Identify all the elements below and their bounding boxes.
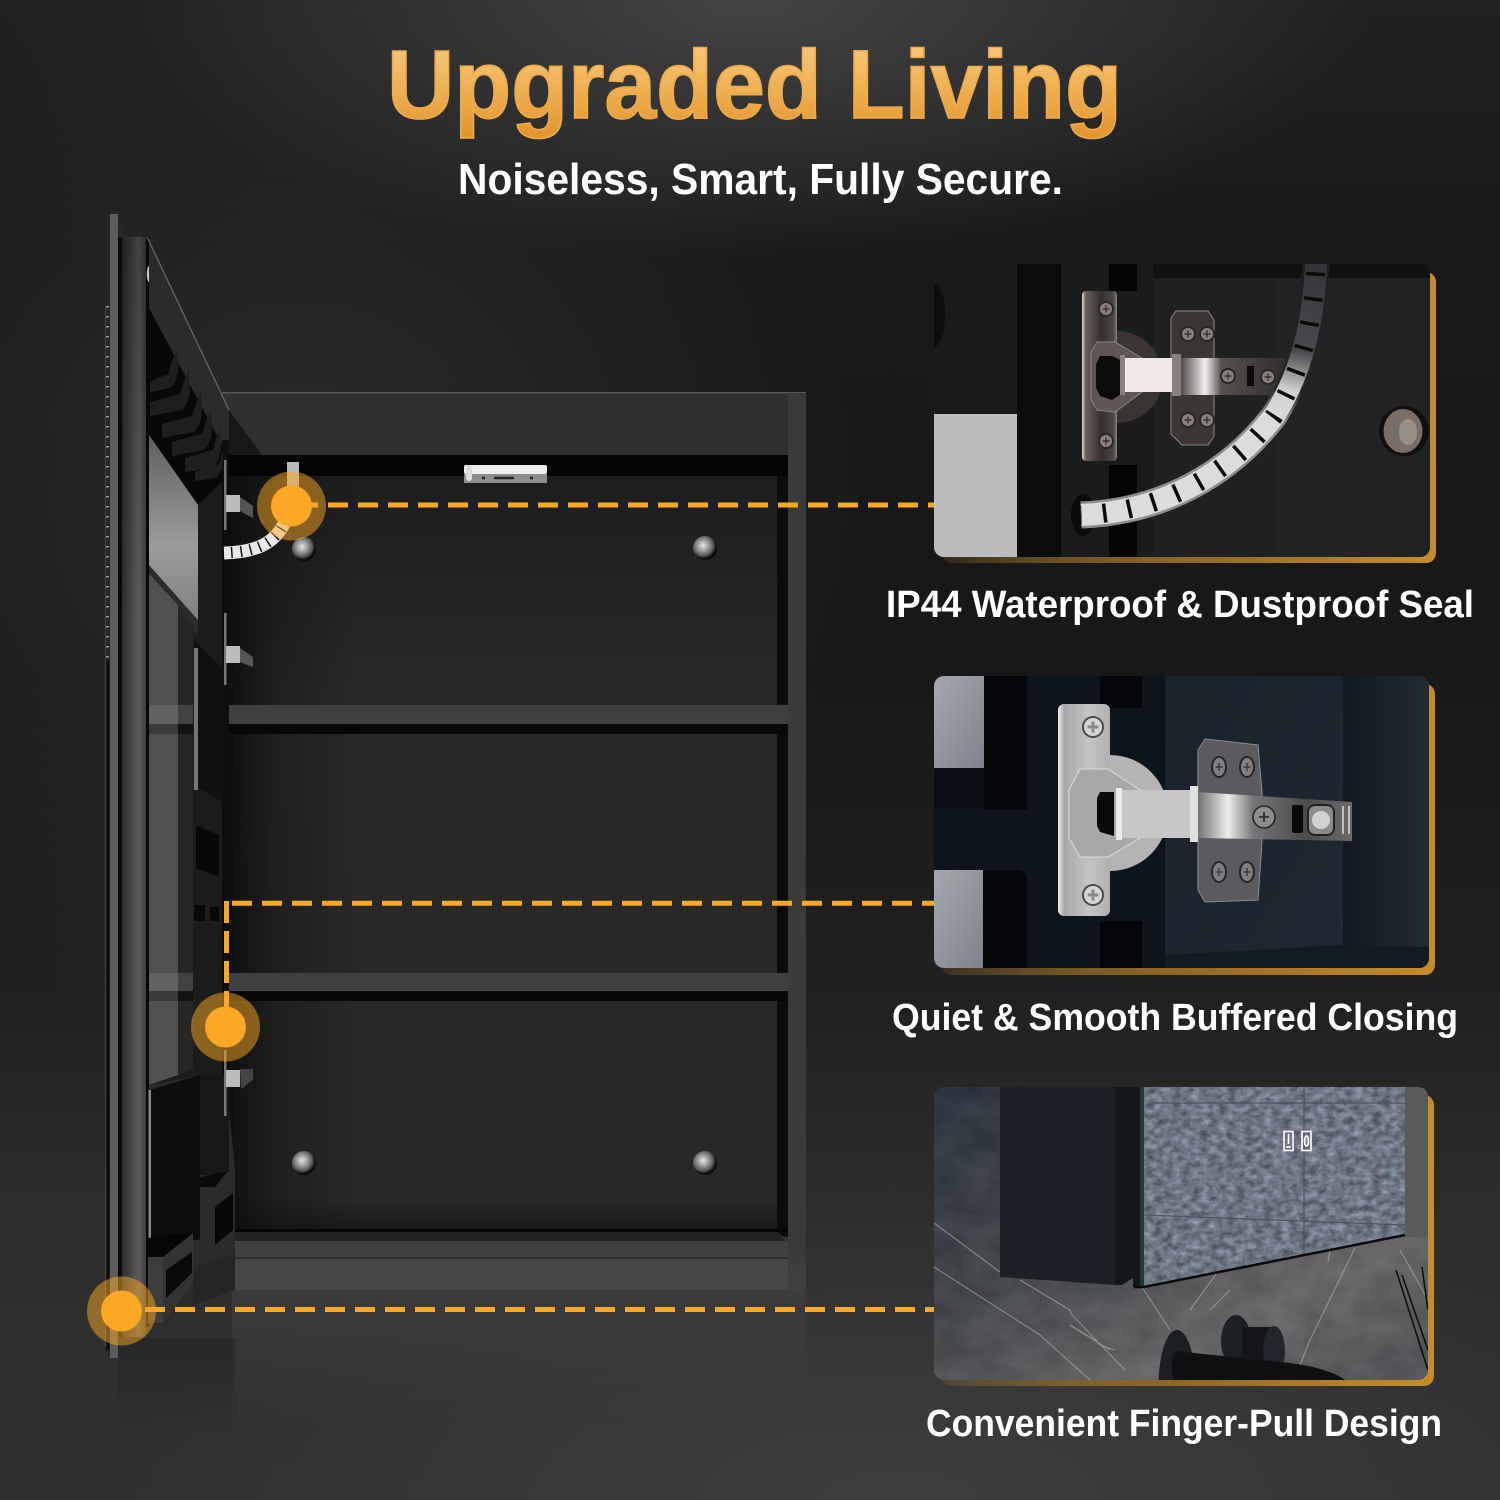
door inner panel — [147, 237, 235, 1325]
cabinet bottom panel — [228, 1229, 788, 1259]
door vertical mirror strip — [149, 574, 178, 1085]
title: Upgraded Living — [387, 30, 1122, 139]
cabinet interior back panel — [228, 455, 788, 1237]
cabinet top panel — [222, 392, 806, 476]
door shelf reflections — [149, 705, 178, 724]
lower shelf — [228, 973, 788, 1001]
door hinges — [224, 460, 299, 1116]
cabinet illustration — [105, 212, 806, 1438]
spiral cable — [224, 522, 285, 553]
door mirror panel — [149, 435, 198, 620]
marker: hinge — [257, 472, 326, 540]
caption: buffered closing: Quiet & Smooth Buffered Closing — [892, 997, 1458, 1039]
door side window — [194, 640, 222, 802]
marker: buffered closing — [191, 992, 260, 1062]
caption: finger-pull: Convenient Finger-Pull Design — [926, 1403, 1442, 1445]
magnetic latch — [464, 465, 547, 483]
cabinet right side wall — [777, 393, 806, 1265]
panel: finger-pull photo — [934, 1087, 1434, 1386]
marker: finger pull — [87, 1276, 156, 1346]
subtitle: Noiseless, Smart, Fully Secure. — [458, 155, 1063, 204]
door lower compartment — [149, 1075, 200, 1240]
shelf pin dowels — [292, 536, 717, 1175]
panel: waterproof seal photo — [923, 262, 1436, 563]
door bottle rack — [150, 350, 224, 481]
door frame column — [118, 237, 151, 1337]
panel: buffered closing photo — [934, 676, 1435, 975]
dashed leader lines — [145, 505, 934, 1310]
cabinet floor reflection — [118, 1258, 806, 1438]
touch sensor icons — [1284, 1132, 1311, 1150]
door edge strip — [105, 212, 128, 1358]
caption: waterproof seal: IP44 Waterproof & Dustproof Seal — [886, 584, 1474, 626]
black faucet — [1158, 1315, 1345, 1380]
upper shelf — [228, 705, 788, 734]
